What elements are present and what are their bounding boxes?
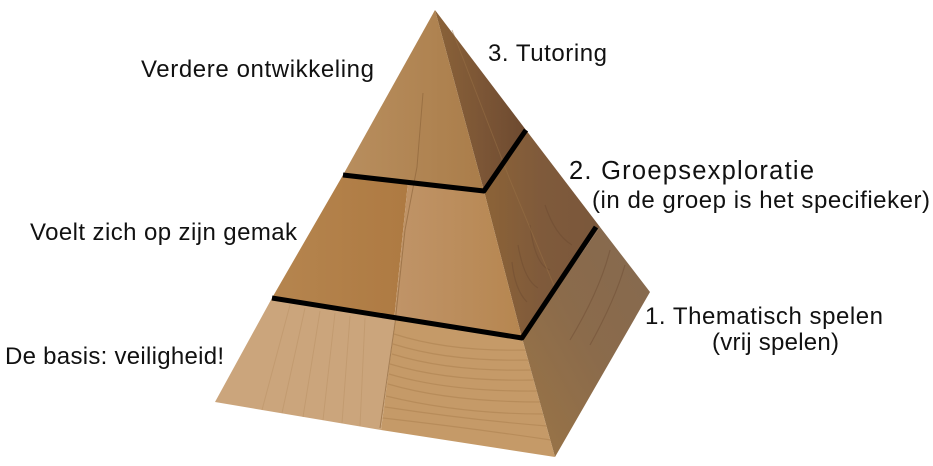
- label: 1. Thematisch spelen: 1. Thematisch spelen: [645, 303, 883, 330]
- label: vrij spelen: (vrij spelen): [712, 329, 839, 356]
- right face facet line: [452, 30, 560, 300]
- label: 3. Tutoring: 3. Tutoring: [488, 40, 607, 67]
- label: 2. Groepsexploratie: 2. Groepsexploratie: [569, 157, 814, 185]
- front face: top tier: [343, 10, 484, 191]
- divider line: lower tier: [272, 227, 596, 338]
- wood seam: [380, 93, 423, 428]
- front face: bottom tier right: [381, 320, 555, 457]
- pyramid: [215, 10, 650, 457]
- front face: middle tier left: [272, 175, 408, 321]
- front face: middle tier right: [394, 182, 522, 338]
- front face: bottom tier left: [215, 298, 395, 430]
- label: Voelt zich op zijn gemak: Voelt zich op zijn gemak: [30, 219, 298, 246]
- wood grain: right face rings: [512, 205, 625, 345]
- label: De basis: veiligheid!: De basis: veiligheid!: [5, 343, 224, 370]
- divider line: upper tier: [343, 130, 526, 191]
- right face: top tier: [435, 10, 526, 191]
- right face: bottom tier: [522, 227, 650, 457]
- wood grain: bottom left vertical: [262, 305, 365, 426]
- wood grain: bottom rings: [383, 334, 551, 440]
- label: in de groep is het specifieker: (in de groep is het specifieker): [592, 187, 930, 214]
- label: Verdere ontwikkeling: Verdere ontwikkeling: [141, 56, 374, 83]
- right face: middle tier: [484, 130, 600, 338]
